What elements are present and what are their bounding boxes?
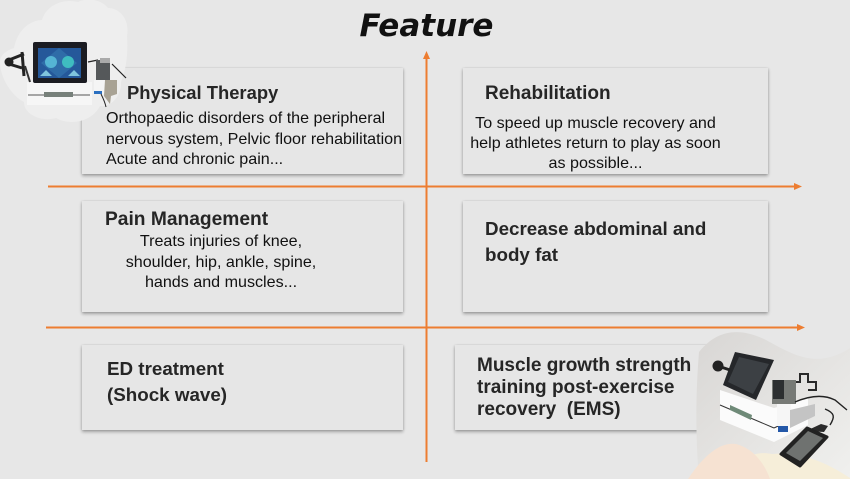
heading: rehabilitation: Rehabilitation [485,83,611,104]
heading: muscle growth: Muscle growth strength [477,355,691,376]
text: physical therapy body: Acute and chronic pain... [106,150,283,168]
heading: ED treatment: (Shock wave) [107,384,227,405]
heading: decrease abdominal and body fat: Decrease abdominal and [485,218,706,239]
heading: muscle growth: training post-exercise [477,377,674,398]
heading: decrease abdominal and body fat [485,218,706,265]
heading: physical therapy: Physical Therapy [127,82,278,103]
heading: muscle growth: recovery (EMS) [477,399,621,420]
panel: physical therapy [82,68,403,174]
icon: device photo top left [4,42,126,121]
heading: pain management: Pain Management [105,209,268,230]
icon: device photo bottom right [688,332,850,479]
panel: decrease abdominal and body fat [463,201,768,312]
text: rehabilitation body: as possible... [549,154,642,172]
panel: ED treatment [82,345,403,430]
panel: muscle growth [455,345,768,430]
text: physical therapy body: Orthopaedic disorders of the peripheral [106,109,385,127]
title: Feature [360,8,493,44]
text: pain management body [126,232,316,291]
text: pain management body: Treats injuries of knee, [140,232,302,250]
text: pain management body: shoulder, hip, ankle, spine, [126,252,316,270]
text: rehabilitation body: To speed up muscle recovery and [475,114,716,132]
heading: ED treatment [107,358,227,405]
text: rehabilitation body: help athletes return to play as soon [470,134,721,152]
heading: muscle growth [477,355,691,420]
text: rehabilitation body [470,114,721,172]
text: physical therapy body [106,109,402,168]
panel: rehabilitation [463,68,768,174]
text: pain management body: hands and muscles... [145,273,297,291]
text: physical therapy body: nervous system, Pelvic floor rehabilitation [106,130,402,148]
panel: pain management [82,201,403,312]
heading: decrease abdominal and body fat: body fat [485,244,558,265]
heading: ED treatment: ED treatment [107,358,224,379]
